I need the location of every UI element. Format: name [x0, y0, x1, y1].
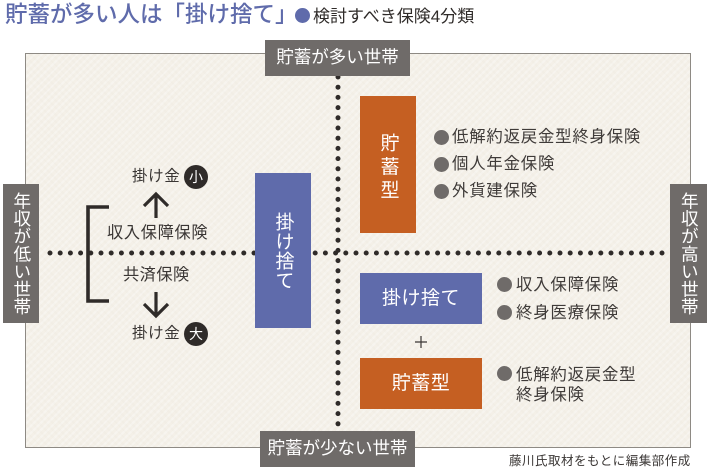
- title: 貯蓄が多い人は「掛け捨て」: [5, 2, 298, 27]
- label: low savings: 貯蓄が少ない世帯: [268, 438, 408, 458]
- item: foreign currency: 外貨建保険: [452, 182, 538, 200]
- box: savings type: [360, 358, 482, 409]
- label: high income: 年収が高い世帯: [679, 192, 699, 315]
- plus sign: [415, 336, 427, 348]
- bracket: [86, 205, 109, 303]
- label: high income: [670, 184, 707, 323]
- label: small premium: [132, 165, 208, 189]
- arrow up: [142, 192, 170, 218]
- box: savings type vertical: [360, 96, 416, 233]
- box: term insurance vertical: 掛け捨て: [272, 212, 294, 290]
- box: term insurance: [360, 273, 482, 324]
- box: savings type: 貯蓄型: [392, 373, 450, 394]
- item: medical: 終身医療保険: [516, 304, 619, 322]
- list: term products: [497, 276, 619, 322]
- label: small premium: 小: [189, 169, 203, 185]
- text: income protection: 収入保障保険: [107, 224, 208, 242]
- label: low savings: [260, 431, 415, 467]
- label: large premium: 掛け金: [132, 325, 180, 342]
- item: individual annuity: 個人年金保険: [452, 155, 555, 173]
- label: large premium: 大: [189, 326, 203, 342]
- list: savings product: 終身保険: [516, 386, 585, 404]
- label: small premium: 掛け金: [132, 168, 180, 185]
- source note: 藤川氏取材をもとに編集部作成: [509, 454, 691, 468]
- box: term insurance: 掛け捨て: [382, 288, 460, 309]
- list: high savings products: [434, 128, 641, 200]
- label: low income: [3, 184, 39, 323]
- list: savings product: 低解約返戻金型: [516, 366, 636, 384]
- panel: quadrant background: [25, 53, 691, 448]
- list: savings product: [497, 366, 636, 404]
- box: savings type vertical: 貯蓄型: [378, 133, 398, 204]
- label: low income: 年収が低い世帯: [12, 192, 32, 315]
- label: large premium: [132, 322, 208, 346]
- label: high savings: 貯蓄が多い世帯: [276, 47, 399, 67]
- label: high savings: [265, 40, 410, 76]
- subtitle with bullet: 検討すべき保険4分類: [313, 7, 474, 26]
- text: mutual aid: 共済保険: [123, 266, 190, 284]
- box: term insurance vertical: [255, 173, 311, 328]
- item: low surrender whole life: 低解約返戻金型終身保険: [452, 128, 641, 146]
- item: income protection: 収入保障保険: [516, 276, 619, 294]
- arrow down: [142, 292, 170, 318]
